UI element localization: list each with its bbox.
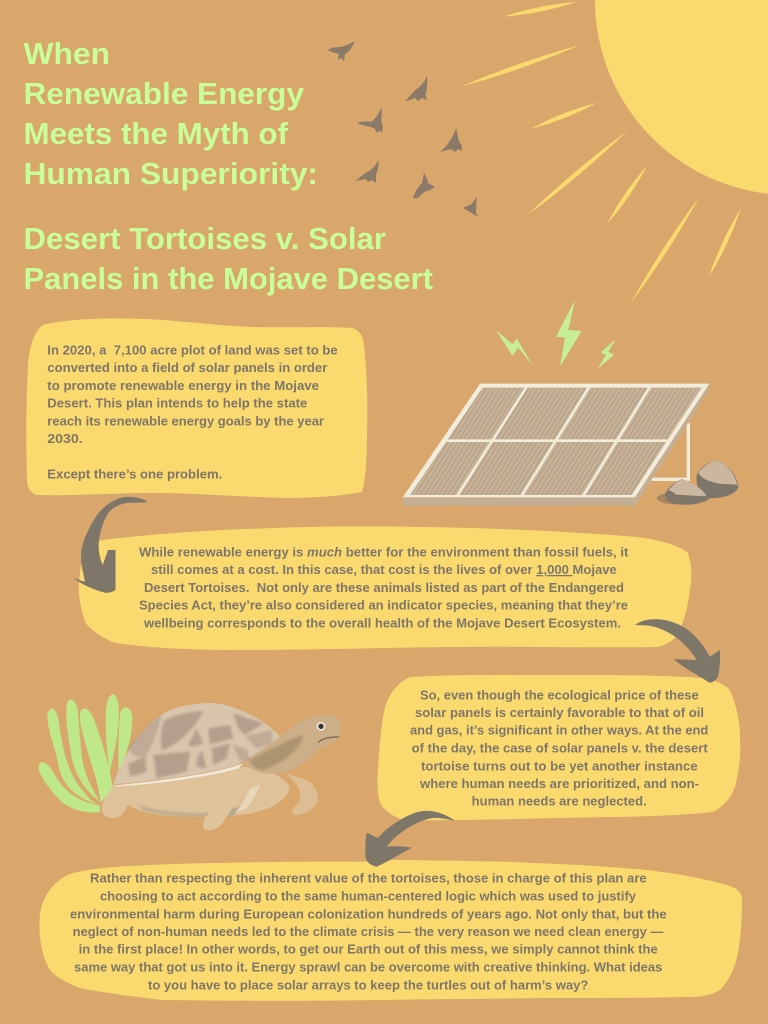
intro text: to promote renewable energy in the Mojave — [47, 378, 319, 393]
title: Human Superiority: — [24, 156, 318, 191]
icon: flock of birds — [328, 41, 478, 217]
conclusion text: neglect of non-human needs led to the climate crisis — the very reason we need clean energy — — [73, 924, 664, 939]
significance text: tortoise turns out to be yet another instance — [421, 758, 698, 773]
cost text: wellbeing corresponds to the overall health of the Mojave Desert Ecosystem. — [143, 615, 621, 630]
sun rays — [460, 2, 741, 303]
tortoise far front leg — [287, 773, 318, 815]
significance text — [410, 687, 708, 809]
intro text: In 2020, a 7,100 acre plot of land was set to be — [47, 342, 338, 357]
title: When — [24, 36, 110, 71]
title — [24, 36, 433, 296]
arrow: intro to cost box — [74, 497, 148, 593]
cost text: still comes at a cost. In this case, that cost is the lives of over 1,000 Mojave — [151, 562, 617, 577]
tortoise shell — [113, 703, 280, 784]
significance text: and gas, it’s significant in other ways. At the end — [410, 723, 708, 738]
conclusion text: in the first place! In other words, to get our Earth out of this mess, we simply cannot think the — [79, 942, 658, 957]
cost text: Species Act, they’re also considered an indicator species, meaning that they’re — [139, 597, 628, 612]
arrow: significance to conclusion box — [365, 811, 455, 867]
intro text — [47, 342, 338, 482]
arrow: cost to significance box — [635, 619, 720, 683]
intro text: Except there’s one problem. — [47, 467, 222, 482]
title: Renewable Energy — [24, 76, 305, 111]
conclusion text: to you have to place solar arrays to keep the turtles out of harm’s way? — [148, 977, 588, 992]
title: Desert Tortoises v. Solar — [24, 221, 386, 256]
conclusion text: choosing to act according to the same human-centered logic which was used to justify — [100, 888, 637, 903]
significance text: solar panels is certainly favorable to that of oil — [415, 705, 704, 720]
panel: conclusion text box — [39, 860, 742, 1001]
icon: sun — [460, 0, 768, 303]
significance text: So, even though the ecological price of these — [420, 687, 699, 702]
intro text: reach its renewable energy goals by the year — [47, 413, 324, 428]
intro text: 2030. — [47, 431, 83, 446]
icon: solar panel with rocks — [403, 384, 738, 506]
significance text: of the day, the case of solar panels v. the desert — [412, 741, 708, 756]
tortoise shell patches — [128, 711, 272, 778]
conclusion text: environmental harm during European colonization hundreds of years ago. Not only that, but the — [70, 906, 667, 921]
tortoise neck and head — [243, 715, 341, 774]
cost text — [139, 545, 629, 630]
title: Meets the Myth of — [24, 116, 289, 151]
tortoise near front leg — [203, 773, 247, 830]
panel: intro text box — [26, 319, 367, 498]
conclusion text — [70, 871, 667, 992]
intro text: Desert. This plan intends to help the state — [47, 396, 307, 411]
conclusion text: same way that got us into it. Energy sprawl can be overcome with creative thinking. What ideas — [74, 960, 662, 975]
panel: cost text box — [79, 526, 691, 650]
significance text: where human needs are prioritized, and non- — [419, 776, 699, 791]
cost text: Desert Tortoises. Not only are these animals listed as part of the Endangered — [144, 580, 624, 595]
icon: desert tortoise — [102, 703, 341, 830]
conclusion text: Rather than respecting the inherent value of the tortoises, those in charge of this plan are — [90, 871, 647, 886]
panel: significance text box — [377, 675, 740, 820]
cost text: While renewable energy is much better for the environment than fossil fuels, it — [139, 545, 629, 560]
significance text: human needs are neglected. — [472, 794, 647, 809]
icon: lightning bolts — [496, 300, 616, 369]
title: Panels in the Mojave Desert — [24, 261, 433, 296]
tortoise body and rear leg — [102, 767, 289, 818]
icon: plant — [39, 694, 132, 812]
intro text: converted into a field of solar panels in order — [47, 360, 327, 375]
